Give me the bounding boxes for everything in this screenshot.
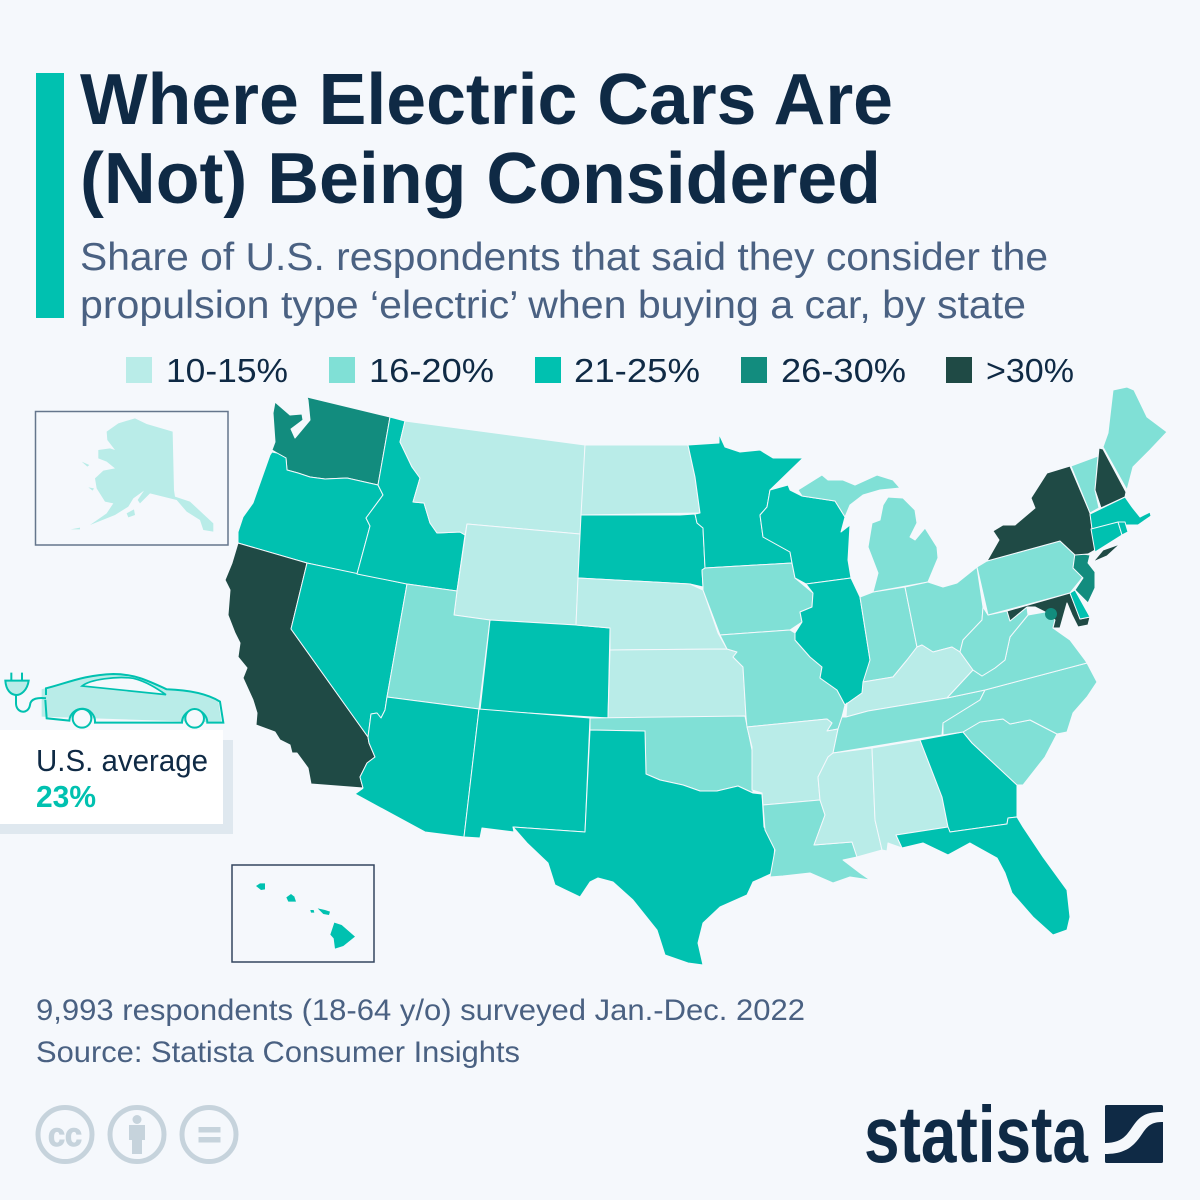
- US state map: [225, 387, 1167, 965]
- legend: [126, 352, 1074, 389]
- Tennessee: [833, 690, 985, 753]
- legend item: >30%: [946, 352, 1074, 389]
- South Carolina: [963, 719, 1057, 785]
- Kentucky: [845, 645, 973, 717]
- Wisconsin: [760, 485, 851, 584]
- Iowa: [702, 563, 813, 635]
- Delaware: [1070, 590, 1090, 619]
- legend item: 21-25%: 21-25%: [574, 352, 700, 389]
- Colorado: [480, 620, 610, 718]
- car body: [42, 674, 222, 723]
- Arkansas: [747, 719, 838, 805]
- subtitle: [80, 236, 1048, 327]
- logo: statista icon: [1105, 1105, 1163, 1163]
- source note: Source: Statista Consumer Insights: [36, 1036, 520, 1069]
- Kansas: [608, 649, 746, 718]
- legend item: 26-30%: [741, 352, 906, 389]
- Arizona: [355, 697, 479, 837]
- Oregon: [238, 452, 383, 574]
- source note: [36, 994, 805, 1069]
- legend item: 26-30%: 26-30%: [781, 352, 906, 389]
- Minnesota: [688, 434, 803, 568]
- Wyoming: [454, 524, 580, 625]
- callout: U.S. average: U.S. average: [36, 743, 208, 778]
- Louisiana: [763, 800, 870, 883]
- South Dakota: [578, 514, 705, 587]
- icon: attribution: [110, 1108, 164, 1162]
- icon: creative commons CC: cc: [48, 1116, 82, 1153]
- legend item: 16-20%: [329, 352, 494, 389]
- icon: electric car: [5, 673, 223, 728]
- Michigan: [798, 475, 938, 592]
- Missouri: [720, 630, 845, 731]
- title: (Not) Being Considered: [80, 139, 881, 219]
- North Dakota: [581, 445, 700, 515]
- Nevada: [291, 563, 407, 737]
- Vermont: [1071, 456, 1099, 513]
- New York: [987, 466, 1120, 562]
- Georgia: [920, 732, 1017, 832]
- Connecticut: [1091, 522, 1122, 552]
- West Virginia: [960, 607, 1028, 676]
- North Carolina: [943, 663, 1097, 735]
- Florida: [896, 817, 1070, 935]
- Idaho: [357, 417, 465, 591]
- subtitle: propulsion type ‘electric’ when buying a car, by state: [80, 284, 1026, 327]
- District of Columbia: [1045, 608, 1057, 620]
- Virginia: [947, 612, 1087, 698]
- plug and cable: [5, 673, 46, 712]
- New Jersey: [1073, 553, 1095, 603]
- icon: no derivatives: [182, 1108, 236, 1162]
- car wheels: [73, 709, 204, 728]
- logo: statista wordmark: statista: [864, 1090, 1088, 1179]
- Texas: [513, 730, 775, 965]
- Alabama: [872, 740, 948, 851]
- title: [80, 60, 893, 219]
- icon: creative commons CC: [38, 1108, 92, 1162]
- legend item: 10-15%: 10-15%: [166, 352, 288, 389]
- Oklahoma: [590, 716, 753, 793]
- Indiana: [860, 587, 917, 682]
- Mississippi: [814, 748, 882, 857]
- Maryland: [1007, 593, 1090, 628]
- inset: Hawaii: [232, 865, 374, 962]
- Nebraska: [576, 578, 727, 650]
- title: Where Electric Cars Are: [80, 60, 893, 140]
- Washington: [272, 397, 390, 485]
- Utah: [387, 584, 490, 709]
- Massachusetts: [1090, 497, 1151, 529]
- New Hampshire: [1095, 448, 1126, 508]
- legend item: 16-20%: 16-20%: [369, 352, 494, 389]
- legend item: 21-25%: [535, 352, 700, 389]
- callout: U.S. average: [0, 730, 233, 834]
- inset: Alaska: [36, 412, 228, 545]
- Maine: [1103, 387, 1167, 490]
- car window: [82, 678, 166, 695]
- Ohio: [905, 567, 983, 652]
- accent bar: [36, 73, 64, 318]
- Rhode Island: [1118, 522, 1128, 535]
- subtitle: Share of U.S. respondents that said they consider the: [80, 236, 1048, 279]
- callout: U.S. average: 23%: [36, 779, 96, 814]
- Pennsylvania: [977, 541, 1083, 615]
- Illinois: [795, 578, 870, 705]
- California: [225, 543, 375, 788]
- Montana: [400, 421, 585, 535]
- New Mexico: [464, 709, 590, 838]
- legend item: >30%: >30%: [986, 352, 1074, 389]
- source note: 9,993 respondents (18-64 y/o) surveyed Jan.-Dec. 2022: [36, 994, 805, 1027]
